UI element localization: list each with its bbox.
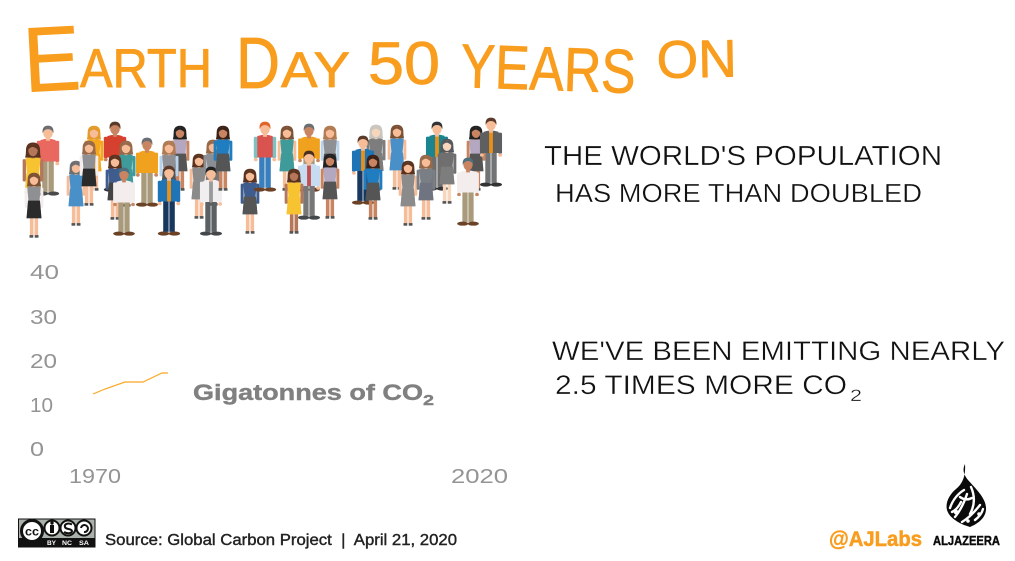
person: woman in lilac — [467, 126, 485, 191]
icon: creative commons badge: BY — [47, 540, 57, 547]
handwritten note: population — [544, 140, 942, 208]
person: woman in grey jacket — [204, 140, 222, 206]
person: man in white shirt — [113, 168, 135, 236]
person: woman in black skirt — [25, 173, 43, 238]
person: woman in blue dress — [388, 125, 406, 190]
icon: creative commons badge: SA — [79, 540, 89, 547]
handwritten note: population: HAS MORE THAN DOUBLED — [555, 178, 922, 208]
title: AY — [281, 42, 350, 98]
person: man in orange jumper — [298, 124, 320, 192]
person: woman in grey trousers — [417, 155, 435, 220]
y-axis labels: 40 — [30, 262, 59, 284]
person: man in red vest — [254, 122, 276, 192]
person: woman in hijab — [367, 125, 385, 191]
person: woman in grey dress — [190, 154, 208, 219]
title: 50 — [368, 30, 440, 97]
line chart: CO2 emissions — [30, 262, 508, 488]
person: woman in teal — [117, 141, 135, 207]
handwritten note: emissions: 2.5 TIMES MORE CO — [555, 370, 847, 400]
y-axis labels: 30 — [30, 307, 57, 329]
person: man in red shirt — [37, 126, 59, 196]
person: man in white shirt — [457, 158, 479, 226]
person: woman in grey dress — [399, 161, 417, 226]
person: woman in teal dress — [278, 126, 296, 191]
title: D — [236, 24, 280, 104]
title: YEARS — [460, 32, 637, 107]
population illustration — [23, 118, 502, 238]
person: man in grey suit — [480, 118, 502, 187]
chart unit label: 2 — [423, 392, 434, 409]
person: woman in blue dress — [67, 161, 85, 226]
source line: Source: Global Carbon Project | April 21, 2020 — [105, 532, 457, 549]
x-axis labels — [69, 466, 508, 488]
Al Jazeera wordmark: ALJAZEERA — [933, 534, 1000, 548]
person: woman with lilac top — [171, 126, 189, 191]
x-axis labels: 1970 — [69, 466, 121, 488]
person: woman with black hair — [321, 154, 339, 219]
person: man in red sweater — [104, 122, 126, 192]
handwritten note: emissions — [552, 336, 1005, 405]
person: man in teal — [426, 122, 448, 191]
title — [21, 7, 737, 112]
handwritten note: population: THE WORLD'S POPULATION — [544, 140, 942, 171]
person: woman with vest — [321, 126, 339, 191]
person: woman in navy — [106, 155, 124, 220]
person: woman in bright blue — [214, 126, 232, 191]
y-axis labels: 20 — [30, 351, 57, 373]
person: woman in navy cardigan — [241, 169, 259, 234]
chart unit label: Gigatonnes of CO — [193, 380, 423, 405]
icon: Al Jazeera logo — [947, 464, 986, 527]
emissions line — [93, 373, 168, 394]
person: man in blue jacket — [352, 136, 374, 205]
handwritten note: emissions: WE'VE BEEN EMITTING NEARLY — [552, 336, 1005, 366]
handwritten note: emissions: 2 — [850, 386, 862, 405]
person: bearded man in blue jacket — [158, 166, 180, 236]
title: E — [21, 7, 83, 112]
chart unit label — [193, 380, 434, 409]
person: woman in dark hijab — [438, 139, 456, 204]
person: man in orange sweater — [136, 138, 158, 207]
person: man in blue shirt with tie — [298, 151, 320, 220]
person: woman in yellow dress — [285, 169, 303, 234]
person: woman in blue top — [364, 155, 382, 220]
person: woman in grey vest — [80, 141, 98, 206]
person: woman in blue blouse — [160, 141, 178, 207]
y-axis labels: 10 — [30, 395, 53, 417]
title: ARTH — [80, 37, 212, 99]
title: ON — [656, 30, 737, 90]
person: man with tie — [200, 167, 222, 236]
AJLabs handle: @AJLabs — [829, 528, 922, 551]
person: woman in orange — [85, 126, 103, 191]
person: woman in yellow dress — [23, 143, 43, 215]
icon: creative commons badge: cc — [25, 524, 39, 538]
icon: creative commons badge: NC — [62, 540, 72, 547]
y-axis labels: 0 — [30, 439, 44, 461]
x-axis labels: 2020 — [451, 466, 508, 488]
icon: creative commons badge — [18, 519, 95, 547]
y-axis labels — [30, 262, 59, 461]
